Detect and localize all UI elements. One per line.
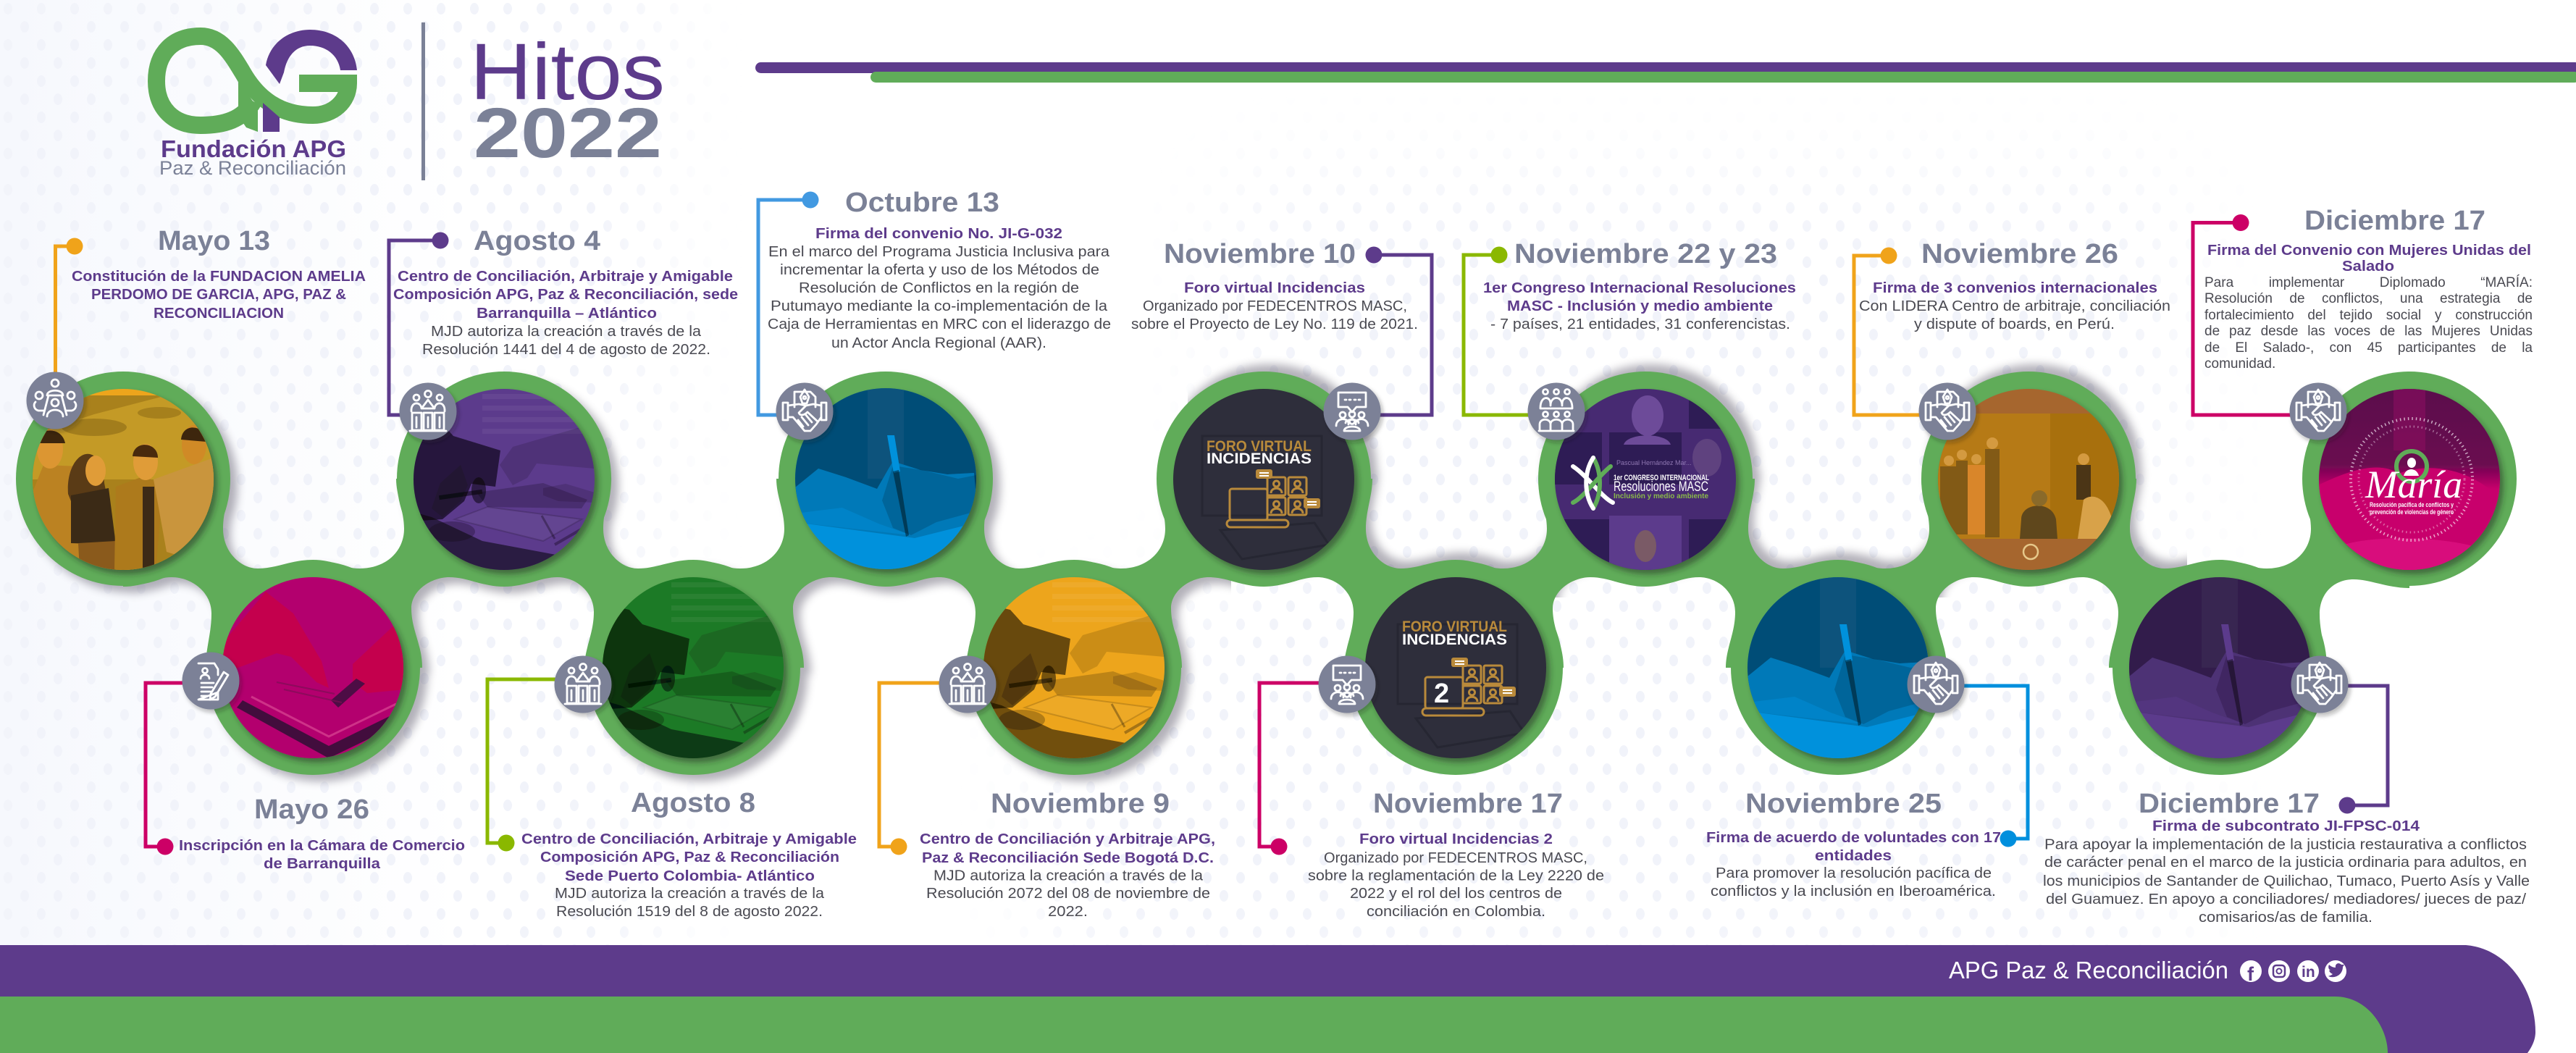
icon: agreement handshake: [2290, 382, 2346, 440]
photo: Noviembre 22 congreso collage: Resoluciones MASC: [1614, 479, 1708, 495]
milestone: Noviembre 22 y 23: 1er Congreso Internacional Resoluciones: [1483, 280, 1796, 296]
milestone: Agosto 4: Resolución 1441 del 4 de agosto de 2022.: [422, 342, 710, 358]
icon: institution people: [555, 656, 611, 713]
milestone: Noviembre 26: Noviembre 26: [1921, 239, 2118, 269]
milestone: Agosto 4: Barranquilla – Atlántico: [477, 306, 657, 322]
milestone: Agosto 8: Sede Puerto Colombia- Atlántico: [565, 868, 815, 884]
milestone: Octubre 13: Putumayo mediante la co-implementación de la: [771, 298, 1108, 314]
photo: Diciembre 17 María, magenta: [2315, 385, 2504, 574]
milestone: Octubre 13: En el marco del Programa Justicia Inclusiva para: [768, 244, 1110, 260]
milestone: Noviembre 25: Para promover la resolución pacífica de: [1716, 865, 1992, 881]
milestone: Diciembre 17 subcontrato: Para apoyar la implementación de la justicia restaurativa a conflictos: [2044, 837, 2527, 853]
milestone: Noviembre 10: Organizado por FEDECENTROS MASC,: [1143, 298, 1407, 314]
green timeline ribbon: [16, 372, 2517, 775]
milestone: Noviembre 22 y 23: Noviembre 22 y 23: [1514, 239, 1777, 269]
header bars: [755, 62, 2576, 83]
photo: Diciembre 17 María, magenta: María: [2365, 463, 2462, 506]
logo: Fundación APG: Paz & Reconciliación: [159, 157, 346, 179]
milestone: Diciembre 17 subcontrato: Firma de subcontrato JI-FPSC-014: [2152, 818, 2420, 834]
milestone: Noviembre 9: Paz & Reconciliación Sede Bogotá D.C.: [922, 850, 1214, 866]
footer label: APG Paz & Reconciliación: [1949, 957, 2228, 983]
photo: Noviembre 22 congreso collage: Inclusión y medio ambiente: [1614, 492, 1708, 500]
photo: Agosto 4 handshake, purple: [410, 385, 598, 574]
milestone: Noviembre 25: Noviembre 25: [1745, 789, 1942, 819]
milestone: Noviembre 9: [920, 789, 1215, 920]
milestone heading: Diciembre 17 convenio: Diciembre 17: [2304, 206, 2485, 236]
text block: Diciembre 17 convenio description: [2204, 274, 2533, 372]
milestone: Agosto 4: MJD autoriza la creación a través de la: [431, 324, 702, 340]
milestone: Noviembre 9: Resolución 2072 del 08 de noviembre de: [926, 886, 1210, 902]
milestone: Mayo 13: PERDOMO DE GARCIA, APG, PAZ &: [91, 287, 346, 303]
milestone heading: Diciembre 17 convenio: [2207, 206, 2531, 274]
milestone: Octubre 13: [768, 188, 1111, 351]
ribbon shadows: [22, 359, 2187, 786]
photo: Noviembre 22 congreso collage: Pascual Hernández Mar...: [1616, 459, 1692, 466]
milestone: Noviembre 9: 2022.: [1048, 904, 1088, 920]
page background: [0, 0, 2160, 945]
photo: Diciembre 17 María, magenta: prevención de violencias de género: [2370, 508, 2454, 516]
milestone: Agosto 4: [393, 226, 738, 358]
milestone: Diciembre 17 subcontrato: Diciembre 17: [2139, 789, 2320, 819]
connector end dots: [67, 191, 2355, 855]
milestone: Octubre 13: Firma del convenio No. JI-G-032: [815, 226, 1062, 242]
milestone: Noviembre 10: Noviembre 10: [1164, 239, 1356, 269]
photo: Noviembre 22 congreso collage: 1er CONGRESO INTERNACIONAL: [1614, 474, 1709, 482]
milestone: Agosto 8: Agosto 8: [631, 788, 755, 818]
photo: Noviembre 25 pen, blue: [1744, 574, 1932, 762]
milestone: Noviembre 25: [1706, 789, 2001, 899]
milestone: Diciembre 17 subcontrato: de carácter penal en el marco de la justicia ordinaria para adultos, en: [2044, 855, 2527, 870]
icon: institution people: [939, 656, 997, 713]
text block: Diciembre 17 convenio description: de paz desde las voces de las Mujeres Unidas: [2204, 324, 2533, 339]
milestone: Agosto 4: Composición APG, Paz & Reconciliación, sede: [393, 287, 738, 303]
milestone: Noviembre 17: Foro virtual Incidencias 2: [1359, 831, 1553, 847]
title: Hitos: [470, 28, 665, 117]
milestone: Mayo 26: de Barranquilla: [264, 856, 381, 872]
photo: Noviembre 22 congreso collage: [1551, 385, 1740, 574]
title: [470, 28, 665, 172]
milestone: Noviembre 9: Centro de Conciliación y Arbitraje APG,: [920, 831, 1215, 847]
photo: Noviembre 10 foro virtual: [1170, 385, 1358, 574]
icon: speaker audience: [1324, 382, 1380, 440]
milestone: Agosto 8: Centro de Conciliación, Arbitraje y Amigable: [521, 831, 857, 847]
milestone: Noviembre 25: Firma de acuerdo de voluntades con 17: [1706, 830, 2001, 846]
logo: Fundación APG: Fundación APG: [161, 135, 346, 162]
photo: Agosto 8 handshake, green: [599, 574, 787, 762]
icon: agreement handshake: [1919, 382, 1976, 440]
photo: Diciembre 17 María, magenta: Resolución pacífica de conflictos y: [2370, 501, 2454, 509]
milestone: Diciembre 17 subcontrato: los municipios de Santander de Quilichao, Tumaco, Puerto Asís y Valle: [2043, 873, 2530, 889]
text block: Diciembre 17 convenio description: de El Salado-, con 45 participantes de la: [2204, 340, 2533, 356]
milestone: Noviembre 22 y 23: - 7 países, 21 entidades, 31 conferencistas.: [1490, 316, 1790, 332]
photo: Noviembre 10 foro virtual: FORO VIRTUAL: [1207, 438, 1312, 455]
milestone: Diciembre 17 subcontrato: del Guamuez. En apoyo a conciliadores/ mediadores/ jueces de paz/: [2046, 892, 2526, 907]
icon: institution people: [400, 382, 456, 440]
photo: Noviembre 17 foro virtual 2: [1362, 574, 1550, 762]
milestone: Mayo 13: Constitución de la FUNDACION AMELIA: [72, 269, 366, 285]
milestone heading: Diciembre 17 convenio: Salado: [2342, 259, 2394, 274]
milestone: Noviembre 9: Noviembre 9: [991, 789, 1170, 819]
text block: Diciembre 17 convenio description: fortalecimiento del tejido social y construcción: [2204, 308, 2533, 323]
photo: Noviembre 17 foro virtual 2: INCIDENCIAS: [1402, 632, 1507, 648]
milestone: Mayo 26: Mayo 26: [254, 794, 369, 825]
milestone heading: Diciembre 17 convenio: Firma del Convenio con Mujeres Unidas del: [2207, 243, 2531, 259]
milestone: Noviembre 26: y dispute of boards, en Perú.: [1914, 316, 2115, 332]
milestone: Diciembre 17 subcontrato: comisarios/as de familia.: [2199, 910, 2372, 926]
milestone: Noviembre 26: Con LIDERA Centro de arbitraje, conciliación: [1859, 298, 2170, 314]
milestone: Noviembre 10: [1131, 239, 1418, 332]
milestone: Noviembre 22 y 23: [1483, 239, 1796, 332]
milestone: Noviembre 17: sobre la reglamentación de la Ley 2220 de: [1308, 868, 1604, 884]
milestone: Mayo 13: Mayo 13: [158, 226, 270, 256]
milestone: Mayo 26: [179, 794, 465, 872]
milestone: Noviembre 17: [1308, 789, 1604, 920]
photo: Noviembre 26 firma, orange: [1934, 385, 2123, 574]
milestone: Noviembre 17: Organizado por FEDECENTROS MASC,: [1324, 850, 1587, 866]
milestone: Agosto 8: Composición APG, Paz & Reconciliación: [540, 849, 839, 865]
milestone: Agosto 4: Agosto 4: [474, 226, 600, 256]
photo: Noviembre 17 foro virtual 2: 2: [1434, 679, 1449, 709]
milestone: Agosto 4: Centro de Conciliación, Arbitraje y Amigable: [398, 269, 733, 285]
milestone: Octubre 13: Resolución de Conflictos en la región de: [799, 280, 1079, 296]
text block: Diciembre 17 convenio description: comunidad.: [2204, 356, 2275, 372]
title: 2022: [474, 93, 662, 172]
milestone: Octubre 13: un Actor Ancla Regional (AAR).: [831, 335, 1046, 351]
social icons: f: [2247, 963, 2254, 985]
icon: meeting table: [26, 372, 84, 429]
milestone: Octubre 13: Caja de Herramientas en MRC con el liderazgo de: [768, 316, 1111, 332]
text block: Diciembre 17 convenio description: Para implementar Diplomado “MARÍA:: [2204, 275, 2533, 290]
icon: crowd: [1528, 382, 1585, 440]
milestone: Noviembre 26: [1859, 239, 2170, 332]
text block: Diciembre 17 convenio description: Resolución de conflictos, una estrategia de: [2204, 291, 2533, 306]
photo: Mayo 26 signing, magenta: [219, 574, 407, 762]
icon: agreement handshake: [2291, 656, 2348, 713]
photo: Noviembre 10 foro virtual: INCIDENCIAS: [1207, 450, 1312, 467]
icon: agreement handshake: [776, 382, 833, 440]
milestone: Noviembre 9: MJD autoriza la creación a través de la: [934, 868, 1204, 884]
photo: Diciembre 17 pen, purple: [2126, 574, 2314, 762]
milestone: Noviembre 22 y 23: MASC - Inclusión y medio ambiente: [1507, 298, 1773, 314]
milestone: Agosto 8: MJD autoriza la creación a través de la: [555, 886, 825, 902]
milestone: Noviembre 17: Noviembre 17: [1373, 789, 1563, 819]
milestone: Diciembre 17 subcontrato: [2043, 789, 2530, 926]
logo: Fundación APG: [156, 30, 357, 179]
milestone: Octubre 13: incrementar la oferta y uso de los Métodos de: [780, 262, 1099, 278]
photo: Mayo 13 group: [29, 385, 217, 574]
milestone: Noviembre 17: conciliación en Colombia.: [1367, 904, 1545, 920]
milestone: Agosto 8: Resolución 1519 del 8 de agosto 2022.: [556, 904, 823, 920]
milestone: Mayo 26: Inscripción en la Cámara de Comercio: [179, 838, 465, 854]
milestone: Noviembre 10: Foro virtual Incidencias: [1184, 280, 1365, 296]
footer band: [0, 945, 2535, 1053]
milestone: Noviembre 25: entidades: [1815, 848, 1892, 864]
header divider: [421, 22, 425, 180]
milestone: Mayo 13: RECONCILIACION: [154, 306, 284, 322]
social icons: in: [2302, 964, 2315, 981]
photo: Octubre 13 pen, blue: [792, 385, 980, 573]
milestone: Noviembre 10: sobre el Proyecto de Ley No. 119 de 2021.: [1131, 316, 1418, 332]
milestone: Noviembre 17: 2022 y el rol del los centros de: [1350, 886, 1562, 902]
milestone: Agosto 8: [521, 788, 857, 920]
photo: Noviembre 9 handshake, amber: [980, 574, 1168, 762]
milestone: Noviembre 25: conflictos y la inclusión en Iberoamérica.: [1711, 884, 1996, 899]
milestone: Noviembre 26: Firma de 3 convenios internacionales: [1873, 280, 2157, 296]
icon: speaker audience: [1318, 656, 1376, 713]
connector lines: [55, 200, 2388, 847]
icon: signed document: [182, 652, 239, 710]
social icons: [2240, 960, 2346, 985]
photo: Noviembre 17 foro virtual 2: FORO VIRTUAL: [1402, 618, 1507, 635]
icon: agreement handshake: [1908, 656, 1964, 713]
milestone: Mayo 13: [72, 226, 366, 322]
milestone: Octubre 13: Octubre 13: [845, 188, 999, 218]
